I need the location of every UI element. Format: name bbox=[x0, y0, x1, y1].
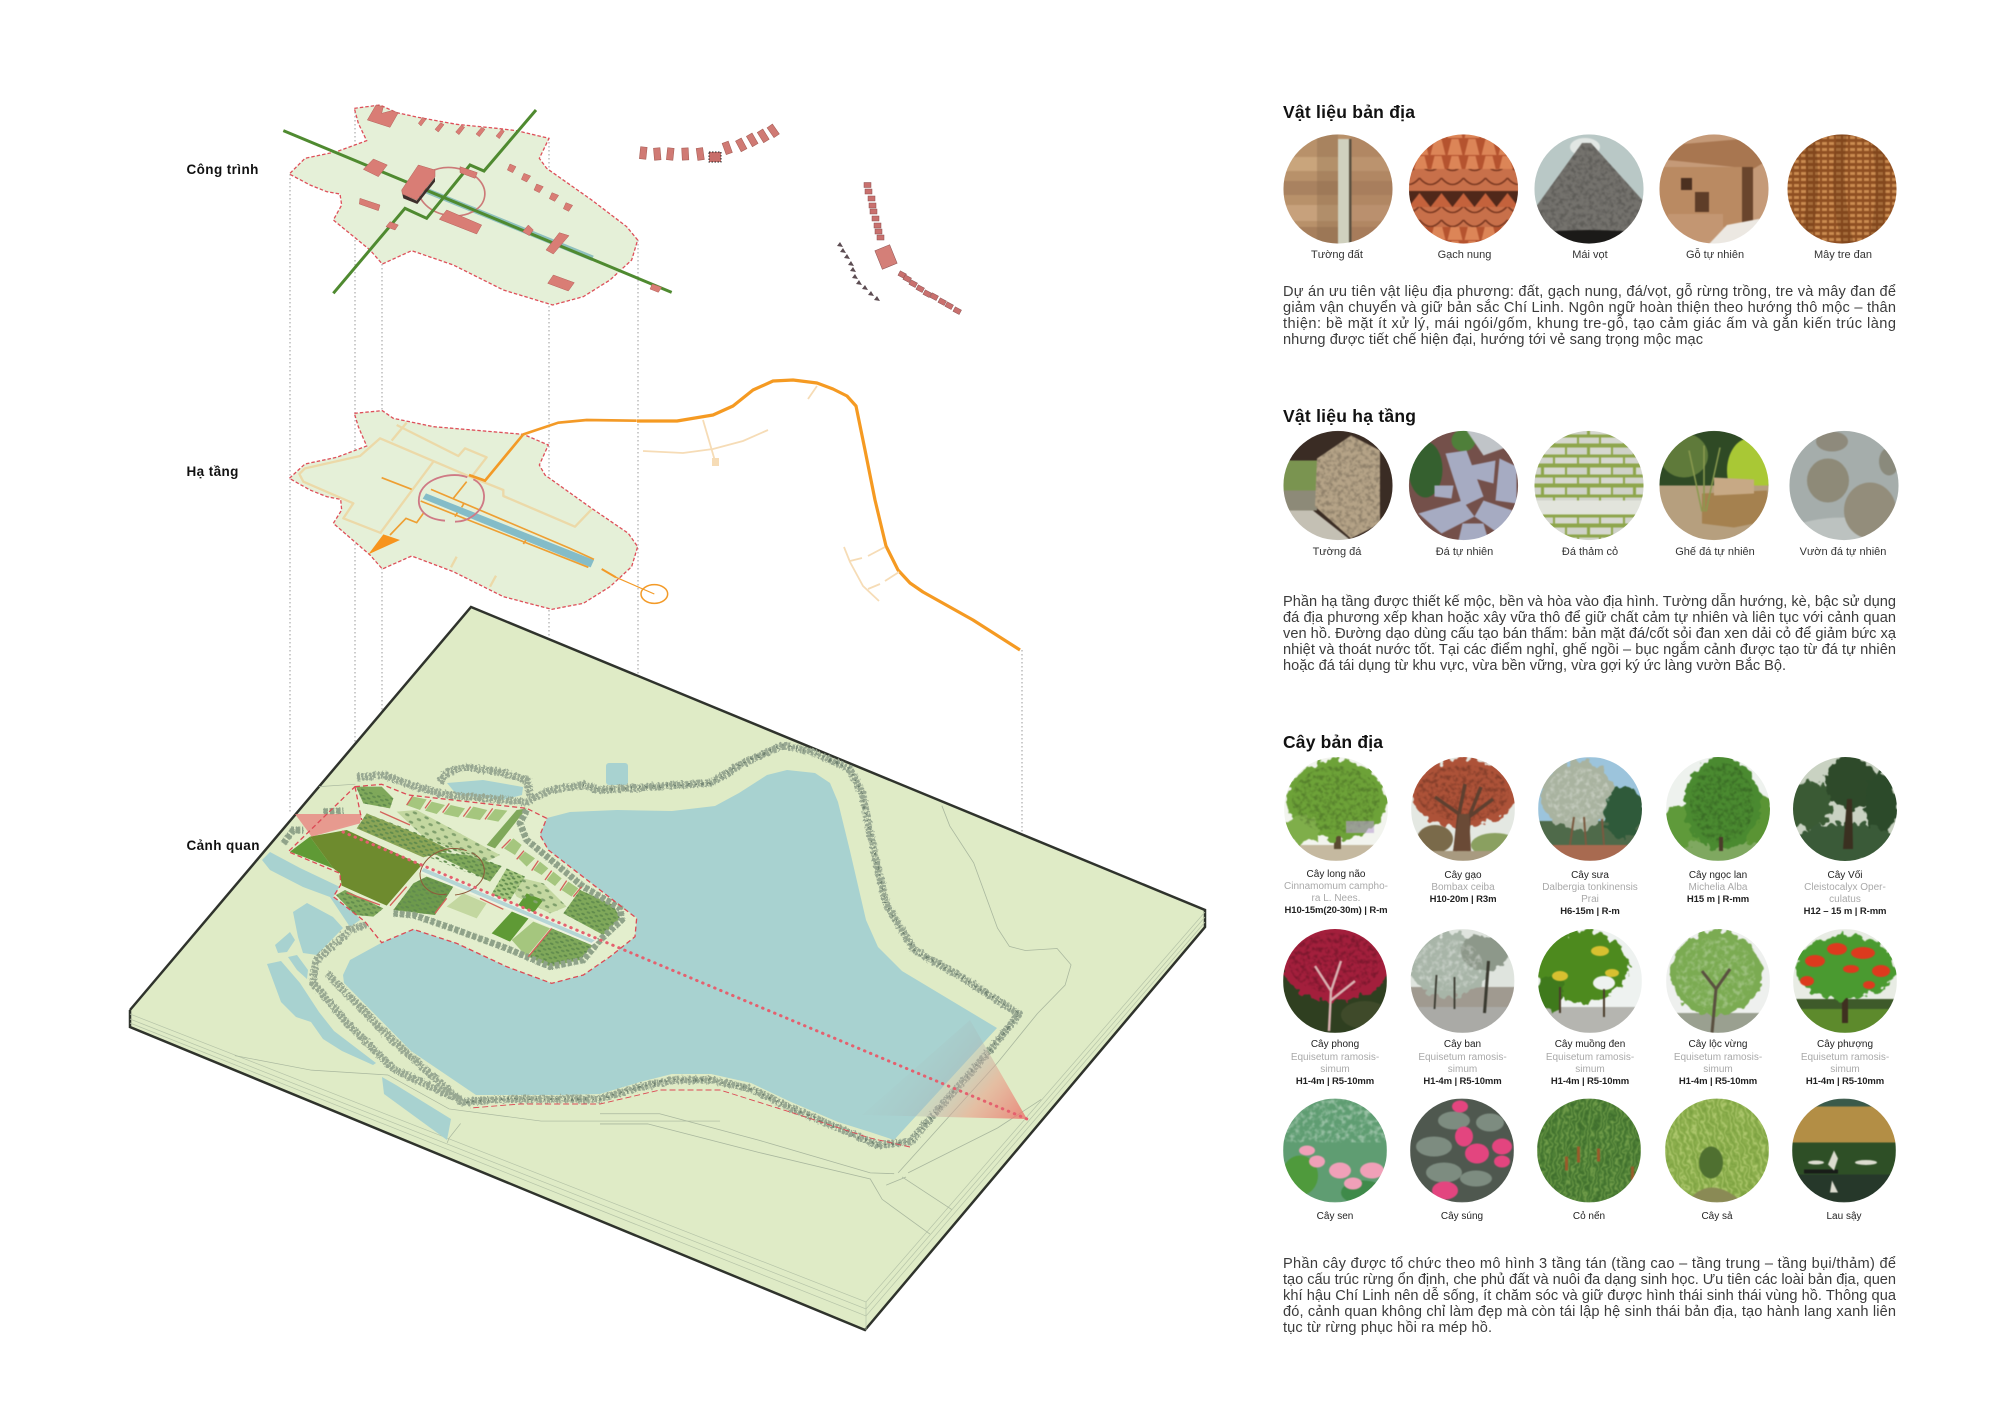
red accent walls bbox=[347, 796, 582, 957]
headland masterplan bbox=[283, 784, 637, 983]
caption: Cây sả bbox=[1701, 1211, 1733, 1222]
caption: simum bbox=[1830, 1064, 1860, 1075]
small huts bbox=[837, 242, 880, 301]
caption: H1-4m | R5-10mm bbox=[1551, 1076, 1629, 1087]
medium green plots bbox=[406, 797, 578, 957]
caption bbox=[1804, 869, 1886, 917]
thin roads east bbox=[600, 806, 1071, 1234]
west viewpoint cone bbox=[295, 814, 362, 837]
photo: Đá tự nhiên bbox=[1408, 430, 1518, 540]
section: Vật liệu hạ tầng bbox=[1283, 406, 1899, 674]
site boundary bbox=[289, 105, 638, 305]
label: Cảnh quan: Cảnh quan bbox=[186, 838, 260, 853]
west ponds bbox=[262, 763, 628, 1140]
caption: Cỏ nến bbox=[1573, 1210, 1605, 1222]
caption: Ghế đá tự nhiên bbox=[1675, 546, 1755, 558]
caption: Cây Vối bbox=[1827, 869, 1863, 881]
caption: Đá tự nhiên bbox=[1436, 546, 1493, 558]
caption: Đá thảm cỏ bbox=[1562, 546, 1618, 558]
paragraph: tạo cấu trúc rừng ổn định, che phủ đất và nuôi đa dạng sinh học. Ưu tiên các loài bản địa, quen bbox=[1283, 1272, 1896, 1288]
caption: Tường đất bbox=[1311, 249, 1363, 261]
lower mid block bbox=[393, 877, 453, 915]
caption: H1-4m | R5-10mm bbox=[1679, 1076, 1757, 1087]
caption: Cây sen bbox=[1317, 1211, 1353, 1222]
caption: Cây phong bbox=[1311, 1039, 1359, 1050]
photo: Cây sen bbox=[1282, 1098, 1387, 1204]
photo: Cây ngọc lan bbox=[1660, 757, 1774, 861]
caption: simum bbox=[1703, 1064, 1733, 1075]
section: Cây bản địa bbox=[1281, 732, 1897, 1336]
paragraph: giảm vận chuyển và giữ bản sắc Chí Linh. Ngôn ngữ hoàn thiện theo hướng thô mộc – thân bbox=[1283, 299, 1896, 316]
caption bbox=[1801, 1039, 1889, 1087]
axis dotted line bbox=[343, 832, 1027, 1119]
planted blocks bbox=[336, 787, 620, 967]
photo: Ghế đá tự nhiên bbox=[1659, 430, 1771, 540]
caption: Cây long não bbox=[1307, 869, 1366, 880]
label: Công trình: Công trình bbox=[186, 162, 259, 177]
caption: Cây sưa bbox=[1571, 870, 1609, 881]
photo: Đá thảm cỏ bbox=[1534, 430, 1644, 540]
caption bbox=[1687, 870, 1749, 905]
caption: simum bbox=[1320, 1064, 1350, 1075]
main road inside site bbox=[469, 420, 637, 481]
water strip bbox=[423, 189, 593, 258]
paragraph: đó, cảnh quan không chỉ làm đẹp mà còn tái lập hệ sinh thái bản địa, tạo hành lang xanh liên bbox=[1283, 1304, 1896, 1320]
paragraph: Phần cây được tổ chức theo mô hình 3 tầng tán (tầng cao – tầng trung – tầng bụi/thảm) để bbox=[1283, 1256, 1896, 1272]
water strip bbox=[423, 493, 594, 567]
orange main road bbox=[637, 380, 1020, 650]
paragraph: nhiệt và thoát nước tốt. Tại các điểm nghỉ, ghế ngồi – bục ngắm cảnh được tạo từ đá tự nhiên bbox=[1283, 641, 1896, 658]
thin roads west bbox=[235, 784, 720, 1143]
caption: H10-20m | R3m bbox=[1430, 894, 1496, 905]
photo: Cây Vối bbox=[1787, 757, 1897, 863]
photo: Tường đá bbox=[1283, 430, 1393, 540]
tree texture bbox=[336, 787, 620, 967]
caption: Prai bbox=[1581, 894, 1599, 905]
caption: Mái vọt bbox=[1572, 249, 1608, 261]
caption: H12 – 15 m | R-mm bbox=[1804, 906, 1886, 917]
circle plaza bbox=[415, 163, 488, 220]
photo: Cây long não bbox=[1284, 757, 1388, 861]
caption: Equisetum ramosis- bbox=[1546, 1052, 1634, 1063]
caption: Mây tre đan bbox=[1814, 249, 1872, 261]
photo: Cây phong bbox=[1281, 925, 1389, 1033]
layer: buildings diagram bbox=[283, 105, 672, 305]
central water axis bbox=[420, 867, 597, 944]
caption: Cây gạo bbox=[1444, 870, 1482, 881]
photo: Vườn đá tự nhiên bbox=[1789, 430, 1899, 550]
site boundary bbox=[289, 411, 638, 609]
pale branch paths bbox=[643, 386, 899, 601]
paragraph: khí hậu Chí Linh nên dễ sống, ít chăm sóc và giữ được hình thái sinh thái vùng hồ. Thông qua bbox=[1283, 1287, 1897, 1304]
caption bbox=[1430, 870, 1496, 905]
caption: Lau sậy bbox=[1826, 1211, 1862, 1222]
board slab bbox=[130, 607, 1205, 1330]
caption bbox=[1418, 1039, 1507, 1087]
vertical projection guide lines bbox=[290, 108, 1022, 1005]
caption: Equisetum ramosis- bbox=[1674, 1052, 1762, 1063]
photo: Cây sưa bbox=[1538, 757, 1644, 861]
caption: H1-4m | R5-10mm bbox=[1296, 1076, 1374, 1087]
paragraph: tục từ rừng phục hồi ra mép hồ. bbox=[1283, 1320, 1492, 1336]
layer: infrastructure diagram bbox=[289, 411, 668, 609]
lake bbox=[343, 770, 997, 1140]
caption: Gỗ tự nhiên bbox=[1686, 248, 1744, 261]
photo: Tường đất bbox=[1283, 134, 1393, 244]
central forest block bbox=[310, 830, 422, 906]
heading: Cây bản địa bbox=[1283, 732, 1383, 752]
headland boundary bbox=[288, 784, 637, 983]
caption: Cinnamomum campho- bbox=[1284, 881, 1388, 892]
paragraph: đá địa phương xếp khan hoặc xây vữa thô để giữ chất cảm tự nhiên và liên tục với cảnh quan bbox=[1283, 610, 1896, 626]
paragraph: ven hồ. Đường dạo dùng cấu tạo bán thấm: bản mặt đá/cốt sỏi đan xen dải cỏ để giảm bức xạ bbox=[1283, 626, 1897, 642]
paragraph: thiện: bề mặt ít xử lý, mái ngói/gốm, khung tre-gỗ, tạo cảm giác ấm và gắn kiến trúc làng bbox=[1283, 315, 1896, 332]
caption: Cây súng bbox=[1441, 1211, 1483, 1222]
caption: Bombax ceiba bbox=[1431, 882, 1495, 893]
caption: Cây phượng bbox=[1817, 1039, 1873, 1050]
detached buildings: east arc bbox=[864, 182, 961, 315]
heading: Vật liệu bản địa bbox=[1283, 102, 1415, 122]
caption: Tường đá bbox=[1313, 546, 1362, 558]
olive block bbox=[357, 813, 450, 857]
caption: Cây lộc vừng bbox=[1689, 1039, 1747, 1050]
caption: H6-15m | R-m bbox=[1560, 906, 1620, 917]
photo: Gạch nung bbox=[1408, 134, 1518, 244]
photo: Lau sậy bbox=[1792, 1098, 1896, 1202]
pale secondary paths bbox=[299, 423, 592, 587]
photo: Cỏ nến bbox=[1537, 1098, 1641, 1202]
caption: Vườn đá tự nhiên bbox=[1800, 546, 1886, 558]
base plan: landscape board bbox=[130, 607, 1205, 1330]
headland tree fringe bbox=[283, 810, 622, 967]
photo: Cây gạo bbox=[1411, 757, 1519, 861]
caption: Equisetum ramosis- bbox=[1801, 1052, 1889, 1063]
caption: ra L. Nees. bbox=[1312, 893, 1360, 904]
caption: H1-4m | R5-10mm bbox=[1423, 1076, 1502, 1087]
photo: Mái vọt bbox=[1533, 134, 1645, 245]
green axes bbox=[283, 110, 672, 293]
photo: Cây ban bbox=[1408, 929, 1514, 1033]
east viewpoint cone bbox=[862, 1020, 1027, 1119]
section: Vật liệu bản địa bbox=[1283, 102, 1897, 348]
caption: Equisetum ramosis- bbox=[1418, 1052, 1507, 1063]
lake shore dashed line bbox=[470, 1090, 910, 1147]
caption: Equisetum ramosis- bbox=[1291, 1052, 1379, 1063]
photo: Cây phượng bbox=[1793, 929, 1897, 1033]
pink plaza arc bbox=[419, 475, 484, 522]
heading: Vật liệu hạ tầng bbox=[1283, 406, 1416, 426]
photo: Cây muồng đen bbox=[1536, 929, 1642, 1033]
orange arrow head bbox=[368, 534, 400, 554]
buildings on site bbox=[359, 105, 662, 292]
caption: Dalbergia tonkinensis bbox=[1542, 882, 1638, 893]
tree belt around lake bbox=[313, 745, 1019, 1145]
paragraph bbox=[1283, 593, 1897, 674]
photo: Gỗ tự nhiên bbox=[1659, 134, 1770, 244]
caption bbox=[1542, 870, 1638, 917]
light planting areas bbox=[397, 810, 567, 918]
caption: simum bbox=[1448, 1064, 1477, 1075]
caption bbox=[1674, 1039, 1762, 1087]
caption bbox=[1291, 1039, 1379, 1087]
headland ground bbox=[288, 784, 637, 983]
caption: Cây ngọc lan bbox=[1689, 870, 1747, 881]
caption: H1-4m | R5-10mm bbox=[1806, 1076, 1884, 1087]
caption: H10-15m(20-30m) | R-m bbox=[1284, 905, 1388, 916]
photo: Cây lộc vừng bbox=[1666, 929, 1770, 1033]
caption: simum bbox=[1575, 1064, 1605, 1075]
detached buildings: north row bbox=[639, 124, 779, 162]
plaza ring bbox=[420, 848, 484, 895]
paragraph bbox=[1283, 1256, 1897, 1336]
caption bbox=[1284, 869, 1388, 916]
paragraph: nhưng được tiết chế hiện đại, hướng tới vẻ sang trọng mộc mạc bbox=[1283, 332, 1703, 348]
main building bbox=[402, 165, 435, 204]
orange rails bbox=[382, 478, 594, 567]
photo: Cây sả bbox=[1665, 1098, 1769, 1202]
caption: Michelia Alba bbox=[1689, 882, 1748, 893]
paragraph: Dự án ưu tiên vật liệu địa phương: đất, gạch nung, đá/vọt, gỗ rừng trồng, tre và mây đan để bbox=[1283, 283, 1896, 300]
bright green lawns bbox=[290, 837, 543, 942]
slab layer lines bbox=[130, 912, 1205, 1330]
paragraph: Phần hạ tầng được thiết kế mộc, bền và hòa vào địa hình. Tường dẫn hướng, kè, bậc sử dụng bbox=[1283, 593, 1896, 610]
lake path and end circle bbox=[602, 569, 668, 603]
caption: Gạch nung bbox=[1438, 249, 1491, 261]
paragraph: hoặc đá tái dụng từ khu vực, vừa bền vững, vừa gợi ký ức làng vườn Bắc Bộ. bbox=[1283, 657, 1786, 674]
caption bbox=[1546, 1038, 1634, 1087]
caption: Cây ban bbox=[1444, 1039, 1481, 1050]
paragraph bbox=[1283, 283, 1896, 348]
label: Hạ tầng: Hạ tầng bbox=[186, 464, 239, 479]
caption: Cây muồng đen bbox=[1555, 1038, 1625, 1050]
photo: Cây súng bbox=[1410, 1098, 1514, 1202]
caption: culatus bbox=[1829, 894, 1861, 905]
board outline bbox=[130, 607, 1205, 1330]
caption: Cleistocalyx Oper- bbox=[1804, 882, 1886, 893]
caption: H15 m | R-mm bbox=[1687, 894, 1749, 905]
photo: Mây tre đan bbox=[1787, 134, 1897, 244]
